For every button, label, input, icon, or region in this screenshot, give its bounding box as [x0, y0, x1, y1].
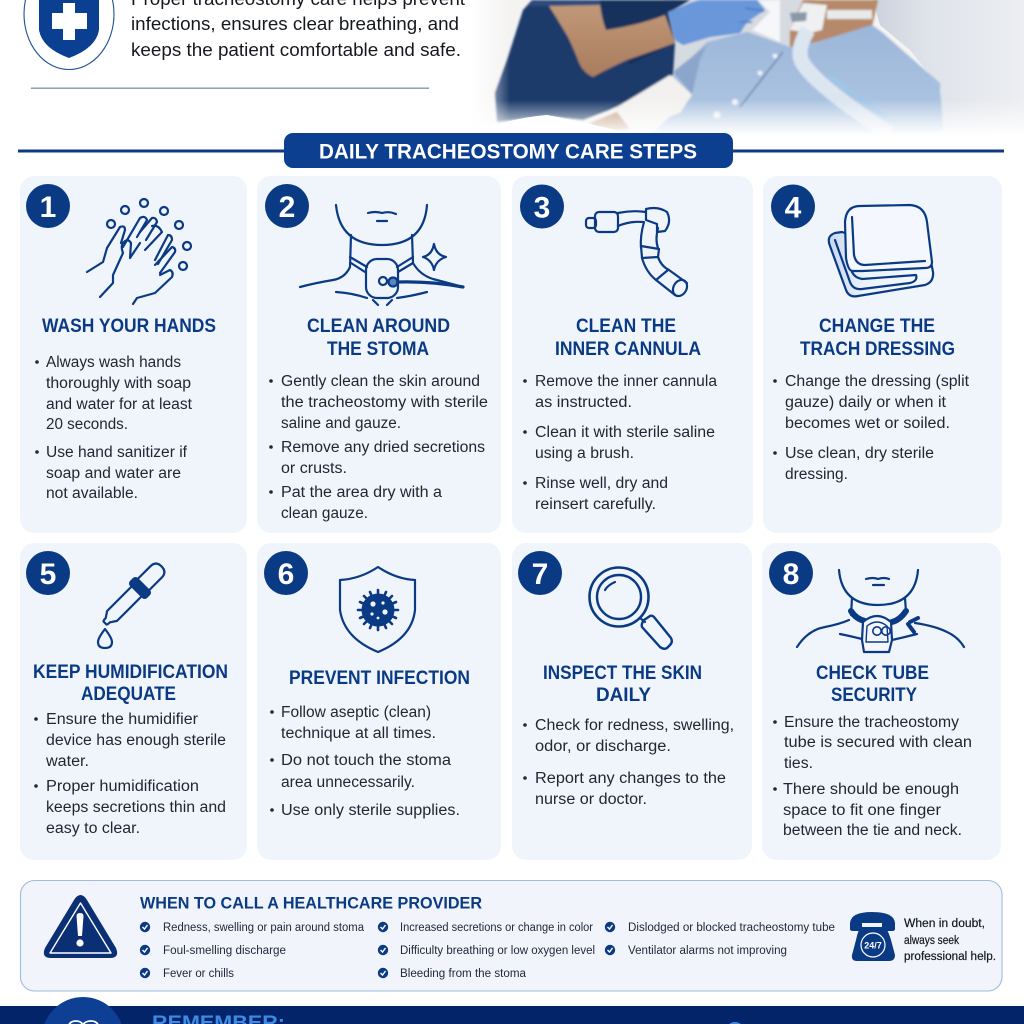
panel: step 3 clean the inner cannula: [512, 176, 753, 533]
panel: step 1 wash your hands: Use hand sanitizer if: [46, 444, 188, 461]
panel: step 1 wash your hands: 1: [40, 191, 56, 224]
panel: step 1 wash your hands: WASH YOUR HANDS: [42, 315, 216, 337]
panel: step 7 inspect the skin daily: [512, 543, 752, 860]
icon: shield with virus: [340, 567, 415, 652]
panel: step 8 check tube security: Ensure the tracheostomy: [784, 714, 959, 731]
panel: step 8 check tube security: CHECK TUBE: [816, 662, 929, 684]
panel: step 7 inspect the skin daily: nurse or doctor.: [535, 791, 647, 808]
panel: step 4 change the trach dressing: gauze) daily or when it: [785, 394, 947, 411]
icon: neck with secured tube ties: [797, 570, 964, 652]
panel: step 8 check tube security: [762, 543, 1001, 860]
panel: step 4 change the trach dressing: CHANGE THE: [819, 315, 935, 337]
panel: step 7 inspect the skin daily: INSPECT THE SKIN: [543, 662, 702, 684]
panel: step 5 keep humidification adequate: keeps secretions thin and: [46, 799, 226, 816]
panel: step 2 clean around the stoma: the tracheostomy with sterile: [281, 394, 488, 411]
panel: step 8 check tube security: ties.: [784, 755, 813, 772]
panel: step 8 check tube security: SECURITY: [831, 684, 917, 706]
panel: step 1 wash your hands: [20, 176, 247, 533]
panel: step 2 clean around the stoma: Pat the area dry with a: [281, 484, 442, 501]
panel: when to call a healthcare provider: WHEN TO CALL A HEALTHCARE PROVIDER: [140, 894, 482, 912]
icon: magnifying glass: [590, 568, 672, 649]
panel: step 3 clean the inner cannula: Clean it with sterile saline: [535, 424, 715, 441]
panel: step 4 change the trach dressing: Change the dressing (split: [785, 373, 970, 390]
panel: step 5 keep humidification adequate: Proper humidification: [46, 778, 199, 795]
panel: step 7 inspect the skin daily: Report any changes to the: [535, 770, 726, 787]
icon: dropper: [97, 559, 169, 648]
panel: step 3 clean the inner cannula: 3: [534, 192, 550, 224]
list: warning signs: Dislodged or blocked tracheostomy tube: [628, 922, 835, 934]
list: warning signs: [140, 922, 835, 980]
panel: when to call a healthcare provider: [20, 880, 1002, 991]
section heading: daily care steps: [18, 133, 1004, 168]
panel: step 5 keep humidification adequate: ADEQUATE: [81, 683, 176, 705]
intro text: keeps the patient comfortable and safe.: [131, 39, 461, 60]
panel: step 4 change the trach dressing: Use clean, dry sterile: [785, 445, 934, 462]
panel: step 5 keep humidification adequate: KEEP HUMIDIFICATION: [33, 661, 228, 683]
panel: step 4 change the trach dressing: becomes wet or soiled.: [785, 415, 950, 432]
panel: step 8 check tube security: There should be enough: [783, 781, 959, 798]
panel: step 4 change the trach dressing: dressing.: [785, 466, 848, 483]
intro text: [131, 0, 465, 60]
panel: step 2 clean around the stoma: Gently clean the skin around: [281, 373, 480, 390]
text: when in doubt: [904, 918, 996, 963]
list: warning signs: Redness, swelling or pain around stoma: [163, 922, 365, 934]
panel: step 6 prevent infection: Use only sterile supplies.: [281, 802, 460, 819]
panel: step 8 check tube security: tube is secured with clean: [784, 734, 972, 751]
panel: step 8 check tube security: between the tie and neck.: [783, 822, 962, 839]
list: warning signs: Ventilator alarms not improving: [628, 945, 787, 957]
icon: 24/7 phone: [850, 912, 895, 961]
panel: step 1 wash your hands: not available.: [46, 485, 138, 502]
icon: medical shield: [24, 0, 114, 70]
panel: step 4 change the trach dressing: [763, 176, 1002, 533]
text: when in doubt: When in doubt,: [904, 918, 985, 930]
intro text: infections, ensures clear breathing, and: [131, 13, 459, 34]
panel: step 5 keep humidification adequate: water.: [45, 753, 89, 770]
panel: step 5 keep humidification adequate: Ensure the humidifier: [46, 711, 198, 728]
panel: step 3 clean the inner cannula: reinsert carefully.: [535, 496, 656, 513]
panel: step 8 check tube security: space to fit one finger: [783, 802, 941, 819]
icon: neck with stoma: [300, 205, 463, 305]
panel: step 1 wash your hands: 20 seconds.: [46, 416, 128, 433]
panel: step 1 wash your hands: thoroughly with soap: [46, 375, 191, 392]
panel: step 2 clean around the stoma: or crusts.: [281, 460, 347, 477]
panel: step 3 clean the inner cannula: INNER CANNULA: [555, 338, 701, 360]
panel: step 6 prevent infection: Follow aseptic (clean): [281, 704, 431, 721]
panel: step 5 keep humidification adequate: easy to clear.: [46, 820, 140, 837]
panel: step 3 clean the inner cannula: using a brush.: [535, 445, 634, 462]
panel: step 1 wash your hands: and water for at least: [46, 396, 193, 413]
panel: step 6 prevent infection: Do not touch the stoma: [281, 752, 451, 769]
icon: inner cannula tube: [586, 208, 690, 299]
list: warning signs: Fever or chills: [163, 968, 234, 980]
list: warning signs: Foul-smelling discharge: [163, 945, 286, 957]
panel: step 2 clean around the stoma: THE STOMA: [327, 338, 429, 360]
panel: step 6 prevent infection: area unnecessarily.: [281, 774, 415, 791]
text: when in doubt: always seek: [904, 935, 959, 947]
panel: step 2 clean around the stoma: clean gauze.: [281, 505, 368, 522]
footer banner: remember: [0, 997, 1024, 1024]
panel: step 3 clean the inner cannula: Remove the inner cannula: [535, 373, 717, 390]
panel: step 3 clean the inner cannula: CLEAN THE: [576, 315, 676, 337]
panel: step 6 prevent infection: 6: [278, 558, 294, 591]
panel: step 4 change the trach dressing: TRACH DRESSING: [800, 338, 955, 360]
panel: step 5 keep humidification adequate: device has enough sterile: [46, 732, 226, 749]
panel: step 2 clean around the stoma: CLEAN AROUND: [307, 315, 450, 337]
list: warning signs: Difficulty breathing or low oxygen level: [400, 945, 595, 957]
list: warning signs: Increased secretions or change in color: [400, 922, 593, 934]
panel: step 2 clean around the stoma: 2: [279, 191, 295, 224]
panel: step 3 clean the inner cannula: as instructed.: [535, 394, 632, 411]
section heading: daily care steps: DAILY TRACHEOSTOMY CARE STEPS: [319, 140, 697, 164]
panel: step 6 prevent infection: PREVENT INFECTION: [289, 667, 470, 689]
panel: step 2 clean around the stoma: [257, 176, 501, 533]
panel: step 4 change the trach dressing: 4: [785, 192, 802, 224]
panel: step 6 prevent infection: [257, 543, 501, 860]
panel: step 7 inspect the skin daily: 7: [532, 558, 548, 591]
icon: warning triangle: [44, 895, 117, 958]
panel: step 6 prevent infection: technique at all times.: [281, 725, 436, 742]
panel: step 2 clean around the stoma: saline and gauze.: [281, 415, 401, 432]
panel: step 7 inspect the skin daily: Check for redness, swelling,: [535, 717, 734, 734]
photo: nurse caring for tracheostomy patient: [492, 0, 1024, 132]
panel: step 8 check tube security: 8: [783, 558, 799, 591]
panel: step 5 keep humidification adequate: [20, 543, 247, 860]
panel: step 1 wash your hands: soap and water are: [46, 465, 181, 482]
panel: step 5 keep humidification adequate: 5: [40, 558, 56, 591]
panel: step 7 inspect the skin daily: DAILY: [596, 684, 651, 706]
icon: 24/7 phone: 24/7: [864, 940, 882, 950]
panel: step 3 clean the inner cannula: Rinse well, dry and: [535, 475, 668, 492]
icon: folded gauze dressing: [829, 205, 933, 296]
panel: step 7 inspect the skin daily: odor, or discharge.: [535, 738, 671, 755]
panel: step 2 clean around the stoma: Remove any dried secretions: [281, 439, 485, 456]
text: when in doubt: professional help.: [904, 951, 996, 963]
icon: washing hands: [87, 199, 191, 304]
panel: step 1 wash your hands: Always wash hands: [46, 354, 181, 371]
list: warning signs: Bleeding from the stoma: [400, 968, 527, 980]
